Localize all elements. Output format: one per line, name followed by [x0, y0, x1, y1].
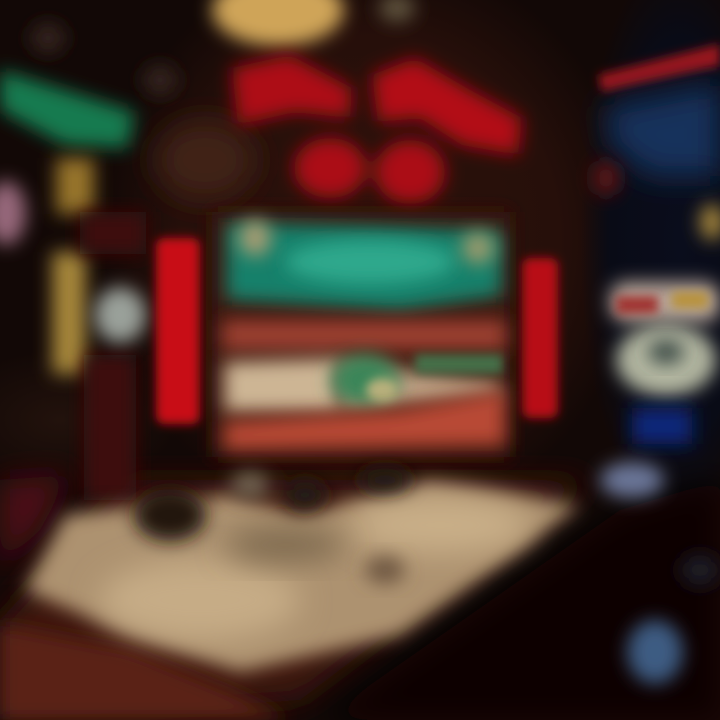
left red panel: [156, 238, 200, 424]
right lower lights: [600, 462, 720, 684]
yellow columns left: [52, 158, 94, 374]
green display: [226, 222, 502, 310]
small background lights: [30, 0, 415, 96]
bottle at left: [80, 212, 146, 500]
red neon sign: [232, 55, 522, 204]
salmon band: [222, 320, 506, 350]
scattered papers on table: [25, 482, 580, 672]
slot machine screen: [212, 212, 510, 457]
right red dot and yellow light: [592, 160, 720, 240]
table surface: [0, 475, 720, 720]
right side blue panel: [604, 84, 720, 176]
ceiling lamp glow: [212, 0, 344, 46]
cream band: [224, 358, 340, 412]
right red panel: [522, 258, 558, 418]
green symbol: [331, 354, 399, 406]
right side bowl: [610, 282, 720, 444]
lower red band: [224, 390, 505, 450]
right side red strip: [598, 44, 720, 92]
screen frame: [212, 212, 510, 457]
pink light left: [0, 181, 26, 245]
green sign left: [0, 70, 135, 148]
chips on table edge: [134, 468, 411, 541]
